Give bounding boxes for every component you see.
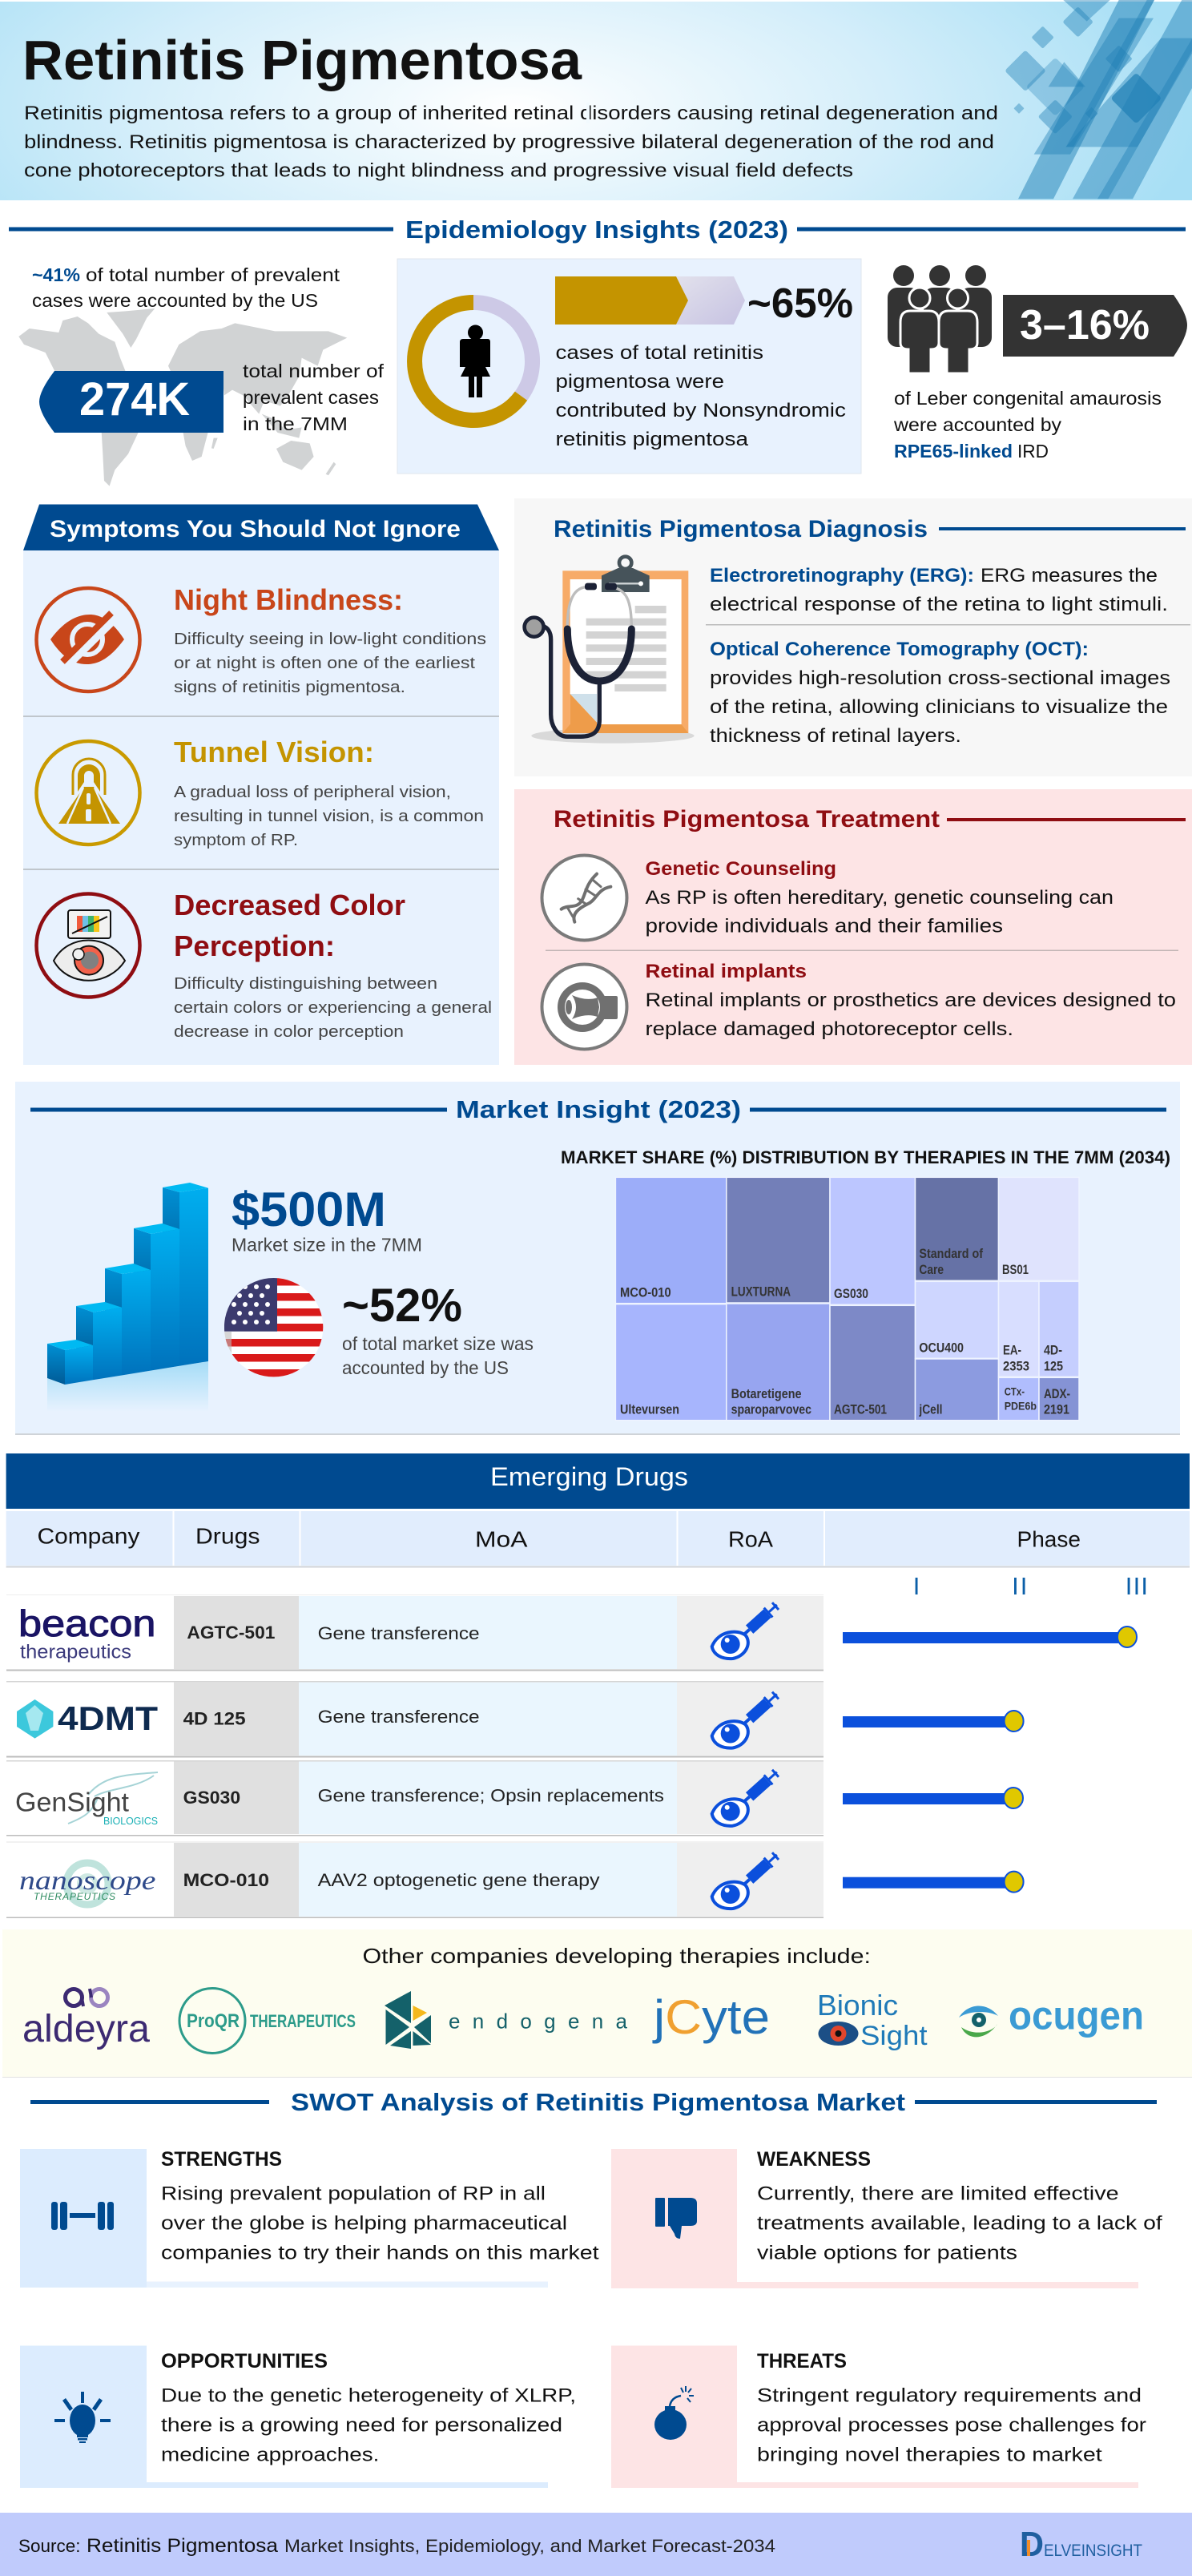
treemap chart: Care bbox=[919, 1262, 944, 1277]
text: retinal implants: replace damaged photoreceptor cells. bbox=[646, 1018, 1013, 1040]
row: nanoscope MCO-010: AAV2 optogenetic gene therapy bbox=[318, 1870, 600, 1890]
logo: beacon therapeutics: beacon bbox=[18, 1602, 155, 1644]
panel: symptoms bbox=[23, 505, 499, 1065]
title: Retinitis Pigmentosa bbox=[22, 29, 582, 91]
text: strengths: STRENGTHS bbox=[161, 2148, 282, 2171]
description bbox=[24, 103, 998, 181]
diagnosis heading: Retinitis Pigmentosa Diagnosis bbox=[554, 516, 928, 542]
hero decorative blue shapes bbox=[1005, 0, 1192, 199]
heading and text: night blindness: or at night is often one of the earliest bbox=[174, 655, 476, 672]
icon: clipboard and stethoscope bbox=[525, 557, 695, 744]
value: 52 percent: ~52% bbox=[342, 1280, 462, 1332]
treemap title: MARKET SHARE (%) DISTRIBUTION BY THERAPIES IN THE 7MM (2034) bbox=[561, 1147, 1170, 1167]
heading and text: night blindness: signs of retinitis pigmentosa. bbox=[174, 679, 405, 696]
row: 4DMT 4D 125 bbox=[6, 1681, 1024, 1758]
stat: 41 percent bbox=[32, 264, 340, 311]
stat: 41 percent: ~41% bbox=[32, 264, 80, 285]
logo: Bionic Sight: Sight bbox=[860, 2021, 928, 2051]
text: weakness: WEAKNESS bbox=[757, 2148, 871, 2171]
treemap chart: LUXTURNA bbox=[731, 1284, 791, 1299]
world map bbox=[18, 308, 347, 486]
treemap chart: 4D- bbox=[1044, 1343, 1062, 1358]
caption: contributed by Nonsyndromic bbox=[556, 400, 846, 421]
other companies heading: Other companies developing therapies include: bbox=[362, 1944, 871, 1968]
text: genetic counseling: provide individuals and their families bbox=[646, 915, 1003, 937]
text: electroretinography bbox=[710, 565, 1168, 615]
logo: ProQR Therapeutics: THERAPEUTICS bbox=[250, 2011, 356, 2031]
phase bar bbox=[843, 1872, 1024, 1893]
heading and text: decreased color perception: Perception: bbox=[174, 929, 335, 962]
SWOT card: strengths bbox=[20, 2148, 599, 2288]
text: weakness bbox=[757, 2148, 1162, 2264]
row: beacon AGTC-501: AGTC-501 bbox=[187, 1623, 275, 1643]
source text: Market Insights, Epidemiology, and Market Forecast-2034 bbox=[284, 2536, 775, 2556]
treemap chart: ADX- bbox=[1044, 1386, 1070, 1401]
text: optical coherence tomography bbox=[710, 639, 1170, 747]
banner: 274K bbox=[39, 371, 224, 433]
value: 500M market size: $500M bbox=[232, 1183, 386, 1236]
heading and text: tunnel vision: symptom of RP. bbox=[174, 832, 298, 849]
phase markers bbox=[913, 1572, 1149, 1600]
text: electroretinography: electrical response of the retina to light stimuli. bbox=[710, 594, 1168, 615]
heading and text: night blindness bbox=[174, 583, 486, 696]
icon: woman bbox=[460, 325, 490, 397]
treemap chart: CTx- bbox=[1005, 1385, 1025, 1398]
logo: aldeyra: aldeyra bbox=[22, 2008, 150, 2050]
epidemiology heading bbox=[9, 216, 1186, 244]
treemap chart: EA- bbox=[1003, 1343, 1021, 1358]
SWOT heading: SWOT Analysis of Retinitis Pigmentosa Market bbox=[291, 2088, 905, 2116]
description: blindness. Retinitis pigmentosa is characterized by progressive bilateral degeneration of the rod and bbox=[24, 131, 994, 153]
phase markers: III bbox=[1126, 1572, 1149, 1600]
logo: DelveInsight: D bbox=[1020, 2525, 1044, 2564]
phase bar bbox=[843, 1627, 1137, 1647]
logo: DelveInsight: ELVEINSIGHT bbox=[1044, 2542, 1142, 2560]
logo: aldeyra bbox=[22, 1989, 150, 2050]
stat text: total prevalent cases: in the 7MM bbox=[243, 413, 348, 434]
panel: nonsyndromic share bbox=[397, 259, 861, 474]
symptoms header: Symptoms You Should Not Ignore bbox=[50, 516, 461, 542]
text: opportunities: OPPORTUNITIES bbox=[161, 2350, 328, 2372]
table column headers bbox=[6, 1510, 1190, 1567]
treemap chart: OCU400 bbox=[919, 1340, 964, 1355]
stat text: Leber congenital amaurosis: were accounted by bbox=[893, 414, 1062, 435]
caption: retinitis pigmentosa bbox=[556, 429, 749, 450]
value: 500M market size: Market size in the 7MM bbox=[232, 1235, 422, 1256]
phase bar bbox=[843, 1788, 1023, 1808]
text: genetic counseling: Genetic Counseling bbox=[646, 858, 836, 880]
text: threats: approval processes pose challenges for bbox=[757, 2415, 1146, 2437]
text: threats: bringing novel therapies to market bbox=[757, 2444, 1102, 2466]
table column headers: MoA bbox=[475, 1526, 528, 1551]
heading and text: night blindness: Night Blindness: bbox=[174, 583, 403, 616]
phase markers: I bbox=[913, 1572, 920, 1600]
treemap chart: BS01 bbox=[1002, 1262, 1029, 1277]
stat text: Leber congenital amaurosis: of Leber congenital amaurosis bbox=[894, 388, 1162, 409]
text: weakness: viable options for patients bbox=[757, 2242, 1017, 2264]
icon: intraocular injection bbox=[712, 1768, 781, 1826]
logo: endogena bbox=[385, 1991, 628, 2049]
panel: other companies bbox=[2, 1929, 1192, 2078]
value: 65 percent: ~65% bbox=[747, 280, 853, 327]
banner: 3-16 percent bbox=[1003, 295, 1187, 357]
row: GenSight GS030 bbox=[6, 1760, 1023, 1836]
text: opportunities bbox=[161, 2350, 576, 2466]
stat: 41 percent: of total number of prevalent bbox=[86, 264, 340, 285]
stat text: Leber congenital amaurosis: RPE65-linked bbox=[894, 441, 1013, 462]
icon: thumbs down bbox=[655, 2198, 697, 2239]
logo: nanoscope therapeutics: nanoscope bbox=[19, 1866, 156, 1896]
treemap chart: Standard of bbox=[919, 1246, 983, 1261]
stat text: total prevalent cases: total number of bbox=[243, 361, 385, 381]
heading and text: tunnel vision: A gradual loss of peripheral vision, bbox=[174, 784, 451, 801]
row: nanoscope MCO-010: MCO-010 bbox=[183, 1870, 269, 1890]
icon: group of people bbox=[888, 265, 992, 373]
icon: intraocular injection bbox=[712, 1850, 781, 1909]
treatment heading: Retinitis Pigmentosa Treatment bbox=[554, 806, 940, 832]
heading and text: decreased color perception bbox=[174, 889, 492, 1041]
stat text: Leber congenital amaurosis bbox=[893, 388, 1162, 462]
SWOT heading bbox=[30, 2088, 1157, 2116]
logo: DelveInsight bbox=[1020, 2525, 1142, 2564]
logo: Bionic Sight: Bionic bbox=[817, 1989, 898, 2022]
logo: nanoscope therapeutics bbox=[19, 1863, 156, 1905]
banner: 3-16 percent: 3–16% bbox=[1020, 302, 1150, 349]
heading and text: decreased color perception: Decreased Color bbox=[174, 889, 405, 921]
treemap chart: Botaretigene bbox=[731, 1386, 801, 1401]
treatment heading bbox=[554, 806, 1186, 832]
text: strengths: Rising prevalent population of RP in all bbox=[161, 2183, 546, 2205]
logo: endogena: endogena bbox=[449, 2010, 628, 2034]
stat text: total prevalent cases: prevalent cases bbox=[243, 387, 379, 408]
SWOT card: threats bbox=[611, 2346, 1146, 2488]
logo: Bionic Sight bbox=[817, 1989, 928, 2051]
icon: bomb bbox=[654, 2386, 694, 2440]
value: 52 percent: of total market size was bbox=[342, 1333, 534, 1354]
logo: ProQR Therapeutics: ProQR bbox=[187, 2010, 240, 2032]
icon: retinal implant bbox=[542, 965, 626, 1050]
text: retinal implants: Retinal implants or prosthetics are devices designed to bbox=[646, 990, 1176, 1011]
symptoms header bbox=[23, 505, 499, 550]
logo: beacon therapeutics bbox=[18, 1602, 155, 1663]
table column headers: Phase bbox=[1017, 1526, 1081, 1551]
text: opportunities: medicine approaches. bbox=[161, 2444, 379, 2466]
row: beacon AGTC-501: Gene transference bbox=[318, 1623, 480, 1643]
row: 4DMT 4D 125: 4D 125 bbox=[183, 1709, 246, 1729]
panel: diagnosis bbox=[514, 498, 1192, 776]
heading and text: decreased color perception: decrease in color perception bbox=[174, 1023, 404, 1041]
emerging drugs header: Emerging Drugs bbox=[490, 1462, 688, 1491]
hero banner bbox=[0, 0, 1192, 200]
SWOT card: opportunities bbox=[20, 2346, 576, 2488]
heading and text: tunnel vision bbox=[174, 736, 484, 849]
emerging drugs header bbox=[6, 1453, 1190, 1509]
treemap chart: GS030 bbox=[834, 1286, 868, 1301]
phase markers: II bbox=[1012, 1572, 1029, 1600]
row: nanoscope MCO-010 bbox=[6, 1841, 1024, 1918]
stat text: Leber congenital amaurosis: IRD bbox=[1017, 441, 1049, 462]
icon: tunnel vision bbox=[37, 741, 139, 845]
logo: GenSight Biologics bbox=[15, 1772, 158, 1827]
icon: DNA bbox=[542, 856, 626, 941]
table column headers: Drugs bbox=[195, 1524, 260, 1548]
text: opportunities: there is a growing need for personalized bbox=[161, 2415, 562, 2437]
heading and text: decreased color perception: Difficulty distinguishing between bbox=[174, 975, 437, 993]
stat text: total prevalent cases bbox=[243, 361, 385, 434]
epidemiology heading: Epidemiology Insights (2023) bbox=[405, 216, 788, 244]
description: cone photoreceptors that leads to night blindness and progressive visual field defects bbox=[24, 160, 853, 181]
phase bar bbox=[843, 1711, 1024, 1731]
diagnosis heading bbox=[554, 516, 1186, 542]
banner: 274K: 274K bbox=[79, 373, 190, 425]
text: optical coherence tomography: of the retina, allowing clinicians to visualize the bbox=[710, 696, 1168, 718]
text: optical coherence tomography: thickness of retinal layers. bbox=[710, 725, 961, 747]
treemap chart: 125 bbox=[1044, 1358, 1063, 1373]
icon: night blindness bbox=[37, 588, 139, 691]
text: retinal implants: Retinal implants bbox=[646, 961, 807, 982]
heading and text: decreased color perception: certain colors or experiencing a general bbox=[174, 999, 492, 1017]
logo: 4DMT bbox=[17, 1699, 158, 1739]
donut chart bbox=[415, 303, 533, 420]
heading and text: tunnel vision: resulting in tunnel vision, is a common bbox=[174, 808, 484, 825]
panel: treatment bbox=[514, 789, 1192, 1065]
text: weakness: Currently, there are limited effective bbox=[757, 2183, 1119, 2205]
logo: jCyte: jCyte bbox=[652, 1990, 770, 2044]
text: retinal implants bbox=[646, 961, 1176, 1040]
logo: beacon therapeutics: therapeutics bbox=[20, 1641, 131, 1663]
value: 52 percent bbox=[342, 1280, 534, 1378]
text: genetic counseling: As RP is often hereditary, genetic counseling can bbox=[646, 887, 1113, 909]
text: opportunities: Due to the genetic heterogeneity of XLRP, bbox=[161, 2385, 576, 2407]
treemap chart: jCell bbox=[919, 1402, 942, 1417]
logo: 4DMT: 4DMT bbox=[58, 1699, 158, 1737]
text: strengths: over the globe is helping pharmaceutical bbox=[161, 2213, 567, 2234]
logo: GenSight Biologics: BIOLOGICS bbox=[103, 1815, 158, 1827]
SWOT card: weakness bbox=[611, 2148, 1162, 2288]
value: 52 percent: accounted by the US bbox=[342, 1357, 509, 1378]
logo: nanoscope therapeutics: THERAPEUTICS bbox=[34, 1891, 115, 1902]
icon: 3D bar chart bbox=[47, 1183, 208, 1412]
treemap chart: Ultevursen bbox=[620, 1402, 679, 1417]
heading and text: tunnel vision: Tunnel Vision: bbox=[174, 736, 374, 768]
table column headers: RoA bbox=[728, 1526, 773, 1551]
treemap chart: sparoparvovec bbox=[731, 1402, 811, 1417]
treemap chart: 2353 bbox=[1003, 1358, 1029, 1373]
text: optical coherence tomography: Optical Coherence Tomography (OCT): bbox=[710, 639, 1089, 660]
text: strengths: companies to try their hands on this market bbox=[161, 2242, 599, 2264]
heading and text: night blindness: Difficulty seeing in low-light conditions bbox=[174, 631, 486, 648]
text: genetic counseling bbox=[646, 858, 1113, 937]
treemap chart: 2191 bbox=[1044, 1402, 1069, 1417]
value: 500M market size bbox=[232, 1183, 422, 1256]
table column headers: Company bbox=[37, 1524, 139, 1548]
icon: intraocular injection bbox=[712, 1600, 781, 1659]
source text bbox=[18, 2535, 775, 2557]
logo: GenSight Biologics: GenSight bbox=[15, 1787, 129, 1817]
treemap chart bbox=[615, 1177, 1079, 1421]
panel: market insight bbox=[15, 1082, 1180, 1435]
source text: Retinitis Pigmentosa bbox=[87, 2535, 279, 2557]
treemap chart: MCO-010 bbox=[620, 1284, 671, 1300]
description: Retinitis pigmentosa refers to a group of inherited retinal disorders causing retinal degeneration and bbox=[24, 103, 998, 124]
footer bbox=[0, 2513, 1192, 2576]
text: threats bbox=[757, 2350, 1146, 2466]
row: beacon AGTC-501 bbox=[6, 1594, 1137, 1671]
caption: cases of total retinitis bbox=[556, 342, 763, 364]
text: weakness: treatments available, leading to a lack of bbox=[757, 2213, 1162, 2234]
source text: Source: bbox=[18, 2536, 80, 2556]
text: strengths bbox=[161, 2148, 599, 2264]
icon: light bulb bbox=[54, 2392, 111, 2443]
text: electroretinography: ERG measures the bbox=[981, 565, 1158, 587]
logo: ProQR Therapeutics bbox=[179, 1989, 356, 2053]
stat: 41 percent: cases were accounted by the US bbox=[32, 290, 318, 311]
icon: intraocular injection bbox=[712, 1689, 781, 1748]
treemap chart: PDE6b bbox=[1005, 1399, 1037, 1412]
row: GenSight GS030: Gene transference; Opsin replacements bbox=[318, 1786, 664, 1806]
market heading bbox=[30, 1095, 1166, 1123]
treemap chart: AGTC-501 bbox=[834, 1402, 887, 1417]
row: 4DMT 4D 125: Gene transference bbox=[318, 1707, 480, 1727]
text: electroretinography: Electroretinography (ERG): bbox=[710, 565, 974, 587]
caption bbox=[556, 342, 846, 450]
icon: US flag bbox=[224, 1278, 324, 1377]
market heading: Market Insight (2023) bbox=[456, 1095, 741, 1123]
caption: pigmentosa were bbox=[556, 371, 724, 393]
text: optical coherence tomography: provides high-resolution cross-sectional images bbox=[710, 667, 1170, 689]
text: threats: Stringent regulatory requirements and bbox=[757, 2385, 1142, 2407]
icon: decreased color perception bbox=[37, 894, 139, 997]
arrow bar bbox=[555, 276, 745, 325]
logo: ocugen: ocugen bbox=[1009, 1993, 1144, 2038]
row: GenSight GS030: GS030 bbox=[183, 1788, 240, 1808]
icon: dumbbell bbox=[51, 2202, 114, 2230]
text: threats: THREATS bbox=[757, 2350, 847, 2372]
